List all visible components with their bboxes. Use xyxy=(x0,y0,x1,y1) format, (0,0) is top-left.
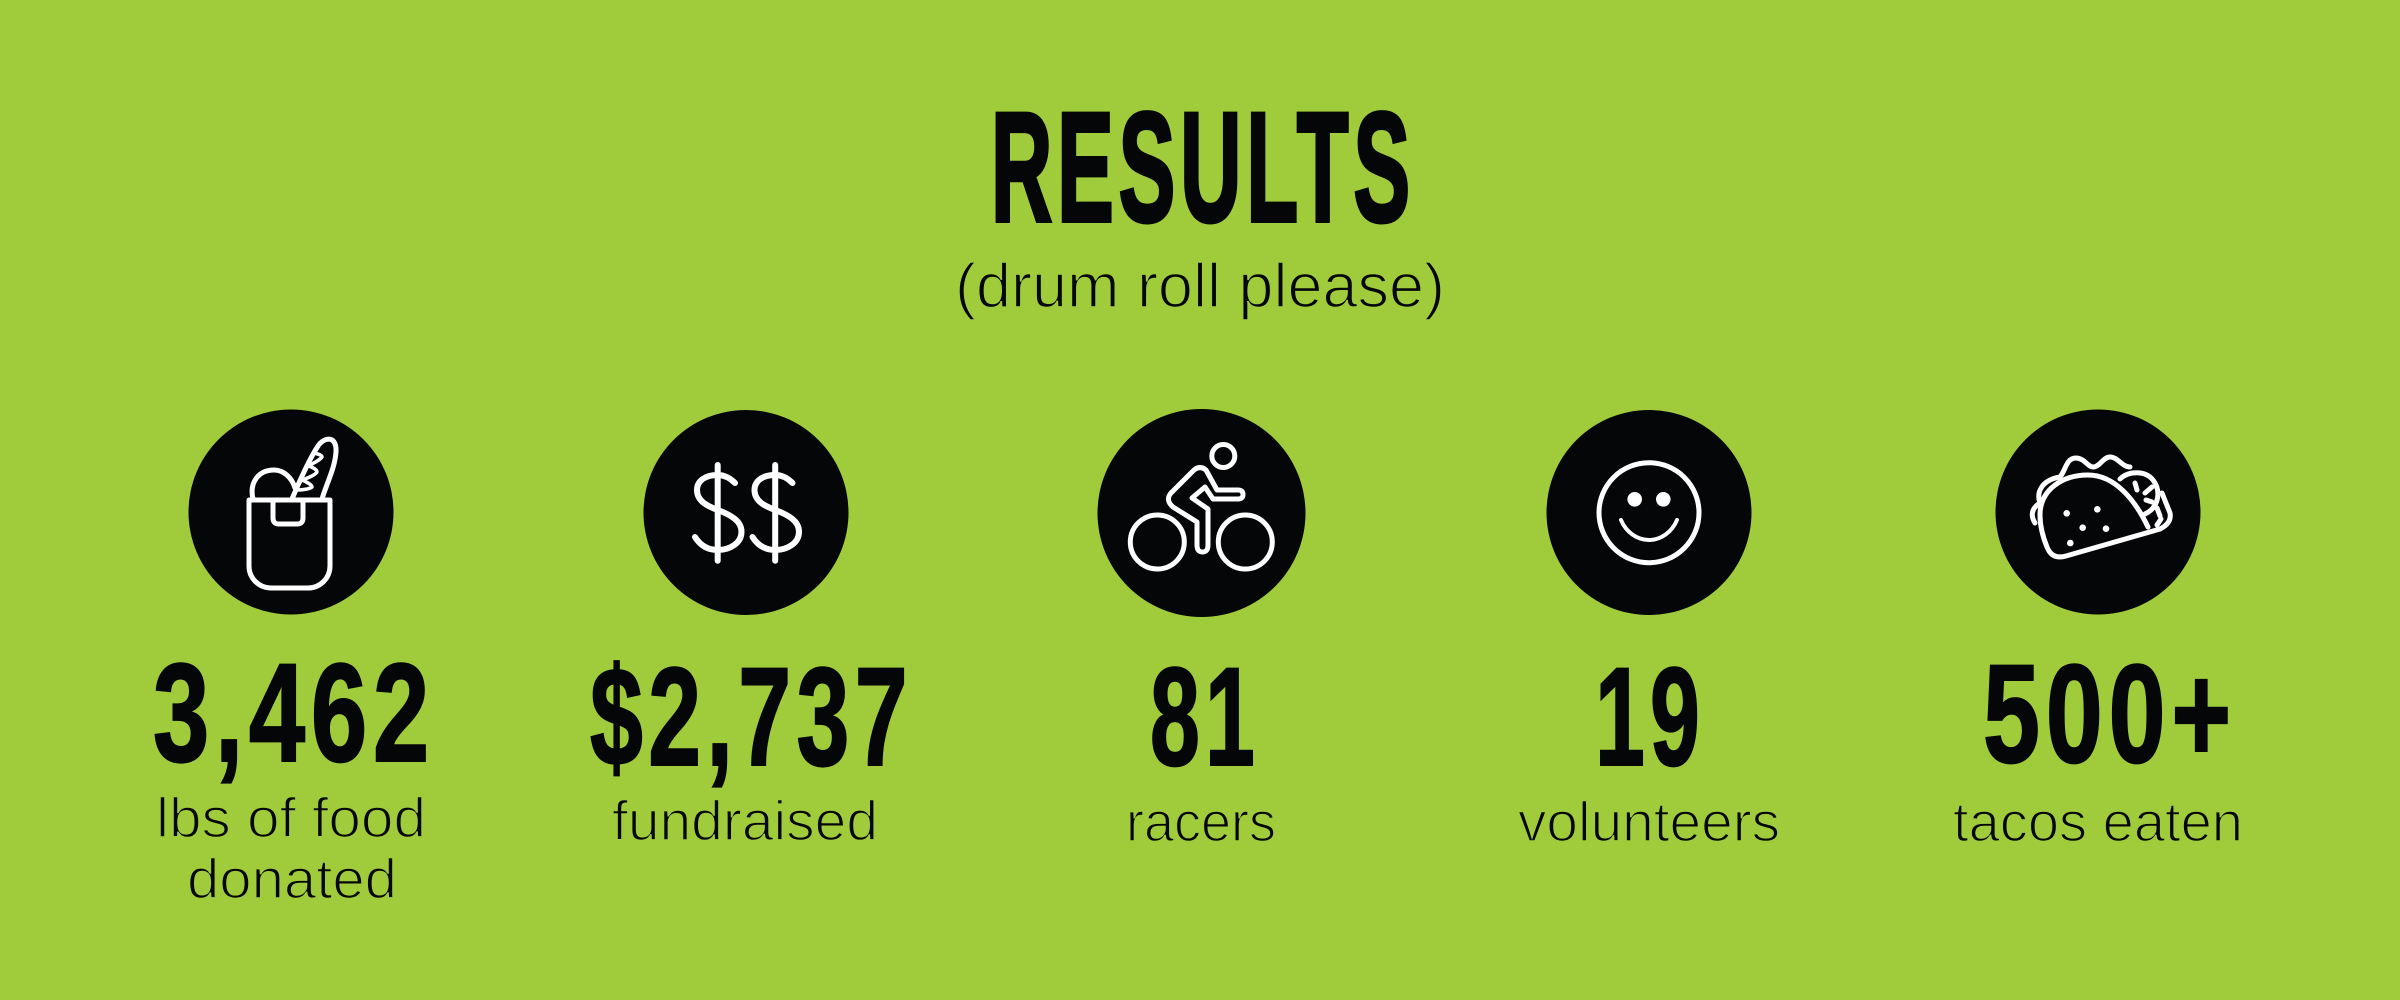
stat number: 3,462 xyxy=(153,634,435,791)
panel: lbs of food donated xyxy=(153,410,435,910)
stat number: 500+ xyxy=(1983,635,2237,792)
stat number: $2,737 xyxy=(590,638,913,795)
stat label: volunteers xyxy=(1518,790,1780,853)
icon: taco xyxy=(1996,410,2200,614)
subtitle: (drum roll please) xyxy=(955,252,1445,321)
panel: tacos eaten xyxy=(1953,410,2243,853)
stat number: 81 xyxy=(1150,638,1260,795)
panel: fundraised xyxy=(590,410,913,852)
icon: dollar signs xyxy=(644,410,848,615)
icon: cyclist xyxy=(1098,409,1306,617)
stat number: 19 xyxy=(1595,638,1705,795)
panel: volunteers xyxy=(1518,410,1780,853)
stat label: racers xyxy=(1126,790,1276,853)
icon: smiley face xyxy=(1546,410,1752,615)
stat label: fundraised xyxy=(612,789,878,852)
stat label line 2: donated xyxy=(187,847,397,910)
stat label: tacos eaten xyxy=(1953,790,2243,853)
stat label: lbs of food xyxy=(156,786,426,849)
icon: grocery bag xyxy=(188,410,394,614)
panel: racers xyxy=(1098,409,1306,853)
title: RESULTS xyxy=(991,81,1415,255)
